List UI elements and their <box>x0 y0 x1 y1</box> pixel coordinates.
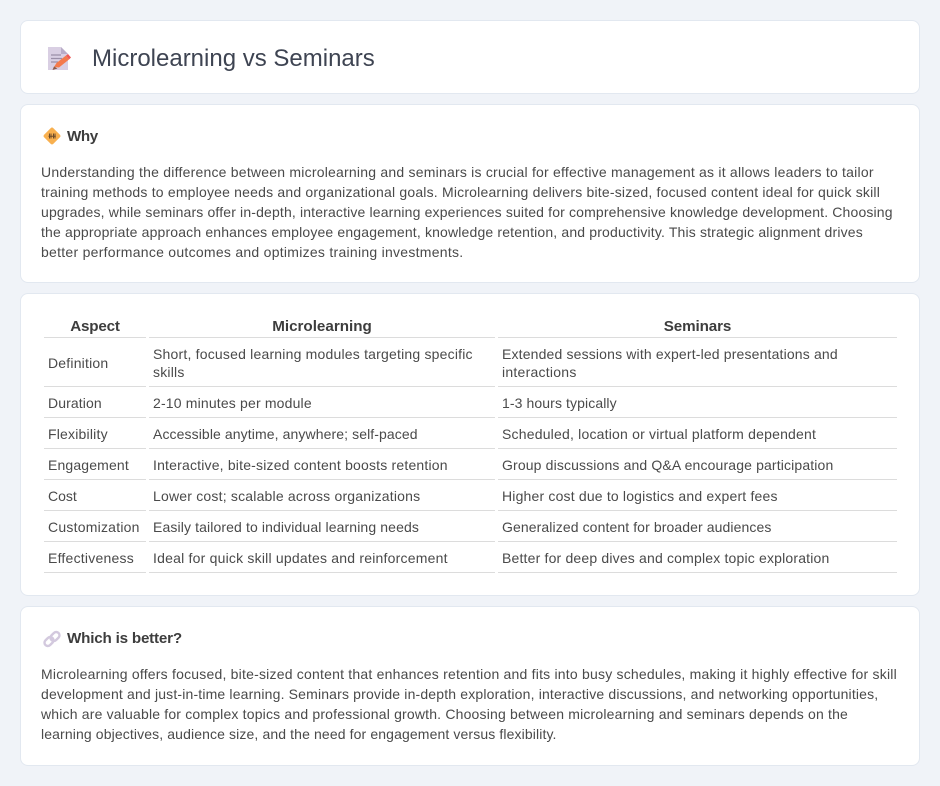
text block: which is better paragraph: Microlearning offers focused, bite-sized content that enhances retention and fits into busy schedules, making it highly effective for skill <box>41 666 897 682</box>
table header row: Aspect <box>70 318 120 335</box>
row: engagement <box>48 457 833 473</box>
row: flexibility <box>48 426 816 442</box>
row: definition <box>48 346 838 380</box>
text block: why paragraph: training methods to employee needs and organizational goals. Microlearning delivers bite-sized, focused content ideal for quick skill <box>41 184 880 200</box>
row: flexibility: Scheduled, location or virtual platform dependent <box>502 426 816 442</box>
row: effectiveness <box>48 550 829 566</box>
row: effectiveness: Effectiveness <box>48 550 134 566</box>
icon: memo with pencil <box>48 47 71 70</box>
table header row: Seminars <box>664 318 731 335</box>
title: Microlearning vs Seminars <box>92 45 375 72</box>
panel: comparison table <box>20 293 920 596</box>
heading: why: Why <box>67 128 98 145</box>
row: definition: Short, focused learning modules targeting specific <box>153 346 473 362</box>
text block: why paragraph: Understanding the difference between microlearning and seminars is crucial for effective management as it allows leaders to tailor <box>41 164 874 180</box>
row: engagement: Group discussions and Q&A encourage participation <box>502 457 833 473</box>
table header row <box>70 318 731 335</box>
row: definition: Definition <box>48 355 108 371</box>
row: cost: Higher cost due to logistics and expert fees <box>502 488 778 504</box>
row: duration <box>48 395 617 411</box>
row: definition: Extended sessions with expert-led presentations and <box>502 346 838 362</box>
row: definition: skills <box>153 364 185 380</box>
text block: which is better paragraph: which are valuable for complex topics and professional growth. Choosing between microlearning and seminars depends on the <box>41 706 848 722</box>
row: duration: 2-10 minutes per module <box>153 395 312 411</box>
row: duration: Duration <box>48 395 102 411</box>
row: cost: Cost <box>48 488 77 504</box>
icon: diamond warning sign <box>44 128 60 144</box>
text block: which is better paragraph: learning objectives, audience size, and the need for engagement versus flexibility. <box>41 726 557 742</box>
text block: which is better paragraph: development and just-in-time learning. Seminars provide in-depth exploration, interactive discussions, and networking opportunities, <box>41 686 878 702</box>
comparison table <box>44 318 897 573</box>
icon: chain link <box>43 630 61 648</box>
text block: why paragraph <box>41 164 893 260</box>
row: effectiveness: Better for deep dives and complex topic exploration <box>502 550 829 566</box>
row: flexibility: Flexibility <box>48 426 108 442</box>
text block: why paragraph: upgrades, while seminars offer in-depth, interactive learning experiences suited for comprehensive knowledge development. Choosing <box>41 204 893 220</box>
row: engagement: Engagement <box>48 457 129 473</box>
text block: why paragraph: better performance outcomes and optimizes training investments. <box>41 244 463 260</box>
row: customization: Generalized content for broader audiences <box>502 519 772 535</box>
row: customization: Customization <box>48 519 140 535</box>
row: flexibility: Accessible anytime, anywhere; self-paced <box>153 426 418 442</box>
row: cost: Lower cost; scalable across organizations <box>153 488 420 504</box>
text block: why paragraph: the appropriate approach enhances employee engagement, knowledge retention, and productivity. This strategic alignment drives <box>41 224 863 240</box>
row: duration: 1-3 hours typically <box>502 395 617 411</box>
row: engagement: Interactive, bite-sized content boosts retention <box>153 457 448 473</box>
panel: header <box>20 20 920 94</box>
heading: which is better: Which is better? <box>67 630 182 647</box>
row: effectiveness: Ideal for quick skill updates and reinforcement <box>153 550 448 566</box>
panel: why <box>20 104 920 283</box>
row: cost <box>48 488 778 504</box>
row: customization <box>48 519 772 535</box>
text block: which is better paragraph <box>41 666 897 742</box>
panel: which is better <box>20 606 920 766</box>
row: definition: interactions <box>502 364 577 380</box>
table header row: Microlearning <box>272 318 372 335</box>
row: customization: Easily tailored to individual learning needs <box>153 519 419 535</box>
